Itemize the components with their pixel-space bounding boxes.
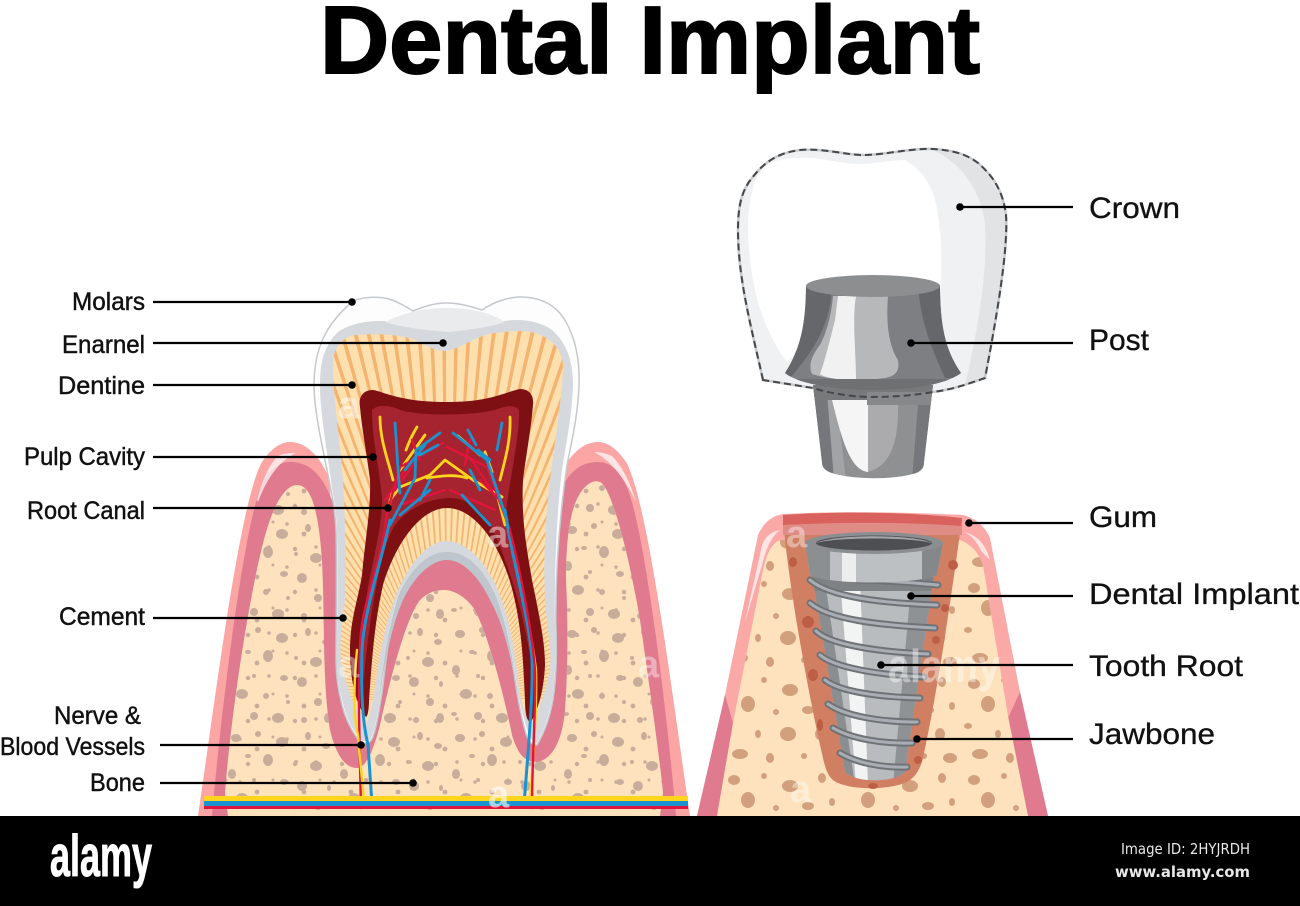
- label: Jawbone: Jawbone: [1089, 718, 1215, 751]
- watermarks: a: [488, 774, 510, 816]
- crown: [738, 149, 1007, 397]
- label: Bone: [90, 769, 417, 797]
- implant in jaw diagram: [697, 512, 1048, 816]
- enamel top highlight: [385, 308, 505, 332]
- label: Pulp Cavity: [24, 443, 377, 471]
- label: Bone: Bone: [90, 769, 145, 797]
- label: Post: Post: [1089, 324, 1150, 357]
- label: Root Canal: Root Canal: [27, 497, 145, 525]
- label: Tooth Root: [877, 650, 1244, 683]
- watermarks: a: [487, 514, 509, 556]
- arch inner grey band: [379, 552, 518, 700]
- label: Crown: Crown: [1089, 192, 1180, 225]
- nerve and vessel base strip: [204, 796, 688, 809]
- crown and post diagram: [738, 149, 1007, 480]
- label: Crown: [956, 192, 1180, 225]
- label: Nerve and Blood Vessels: Nerve &: [54, 702, 141, 730]
- label: Gum: Gum: [1089, 501, 1157, 534]
- label: Nerve and Blood Vessels: Blood Vessels: [0, 733, 145, 761]
- jawbone: [700, 540, 1040, 816]
- image id: Image ID: 2HYJRDH: [1121, 840, 1250, 858]
- tooth enamel outer: [314, 297, 579, 745]
- label: Dentine: [58, 372, 356, 400]
- watermarks: [338, 385, 1000, 816]
- dentine: [333, 331, 563, 724]
- website: www.alamy.com: [1115, 863, 1250, 881]
- screw body: [810, 570, 935, 785]
- label: Post: [907, 324, 1150, 357]
- label: Nerve and Blood Vessels: [0, 702, 365, 761]
- watermarks: alamy: [888, 640, 1000, 692]
- label: Dentine: Dentine: [58, 372, 145, 400]
- bone socket: [783, 513, 962, 789]
- nerves and blood vessels: [354, 417, 536, 808]
- natural tooth diagram: [198, 297, 690, 816]
- crown seam dashes: [738, 149, 1006, 397]
- watermarks: a: [638, 644, 660, 686]
- post body: [785, 275, 961, 390]
- label: Cement: Cement: [59, 603, 145, 631]
- screw collar: [805, 532, 943, 582]
- implant screw: [800, 532, 950, 785]
- watermarks: a: [338, 385, 360, 427]
- label: Jawbone: [913, 718, 1215, 751]
- label: Dental Implant: [907, 578, 1300, 611]
- watermarks: a: [790, 769, 812, 811]
- label: Tooth Root: Tooth Root: [1089, 650, 1244, 683]
- footer logo: alamy: [50, 824, 152, 889]
- outer gum: [697, 512, 1048, 816]
- label: Enarnel: Enarnel: [62, 331, 145, 359]
- label: Cement: [59, 603, 347, 631]
- label: Molars: [72, 288, 356, 316]
- gums: [198, 442, 690, 816]
- enamel grey layer: [320, 320, 573, 743]
- gum highlights: [745, 530, 990, 622]
- bone: [225, 481, 663, 816]
- label: Root Canal: [27, 497, 392, 525]
- footer bar: [0, 816, 1300, 906]
- label: Pulp Cavity: Pulp Cavity: [24, 443, 145, 471]
- label: Enarnel: [62, 331, 447, 359]
- screw threads: [810, 580, 938, 767]
- label: Gum: [965, 501, 1157, 534]
- post neck: [813, 385, 933, 478]
- watermarks: a: [338, 644, 360, 686]
- lower gum shading: [697, 692, 1048, 816]
- label: Molars: Molars: [72, 288, 145, 316]
- pulp cavity: [350, 389, 545, 722]
- label: Dental Implant: Dental Implant: [1089, 578, 1300, 611]
- watermarks: a: [786, 514, 808, 556]
